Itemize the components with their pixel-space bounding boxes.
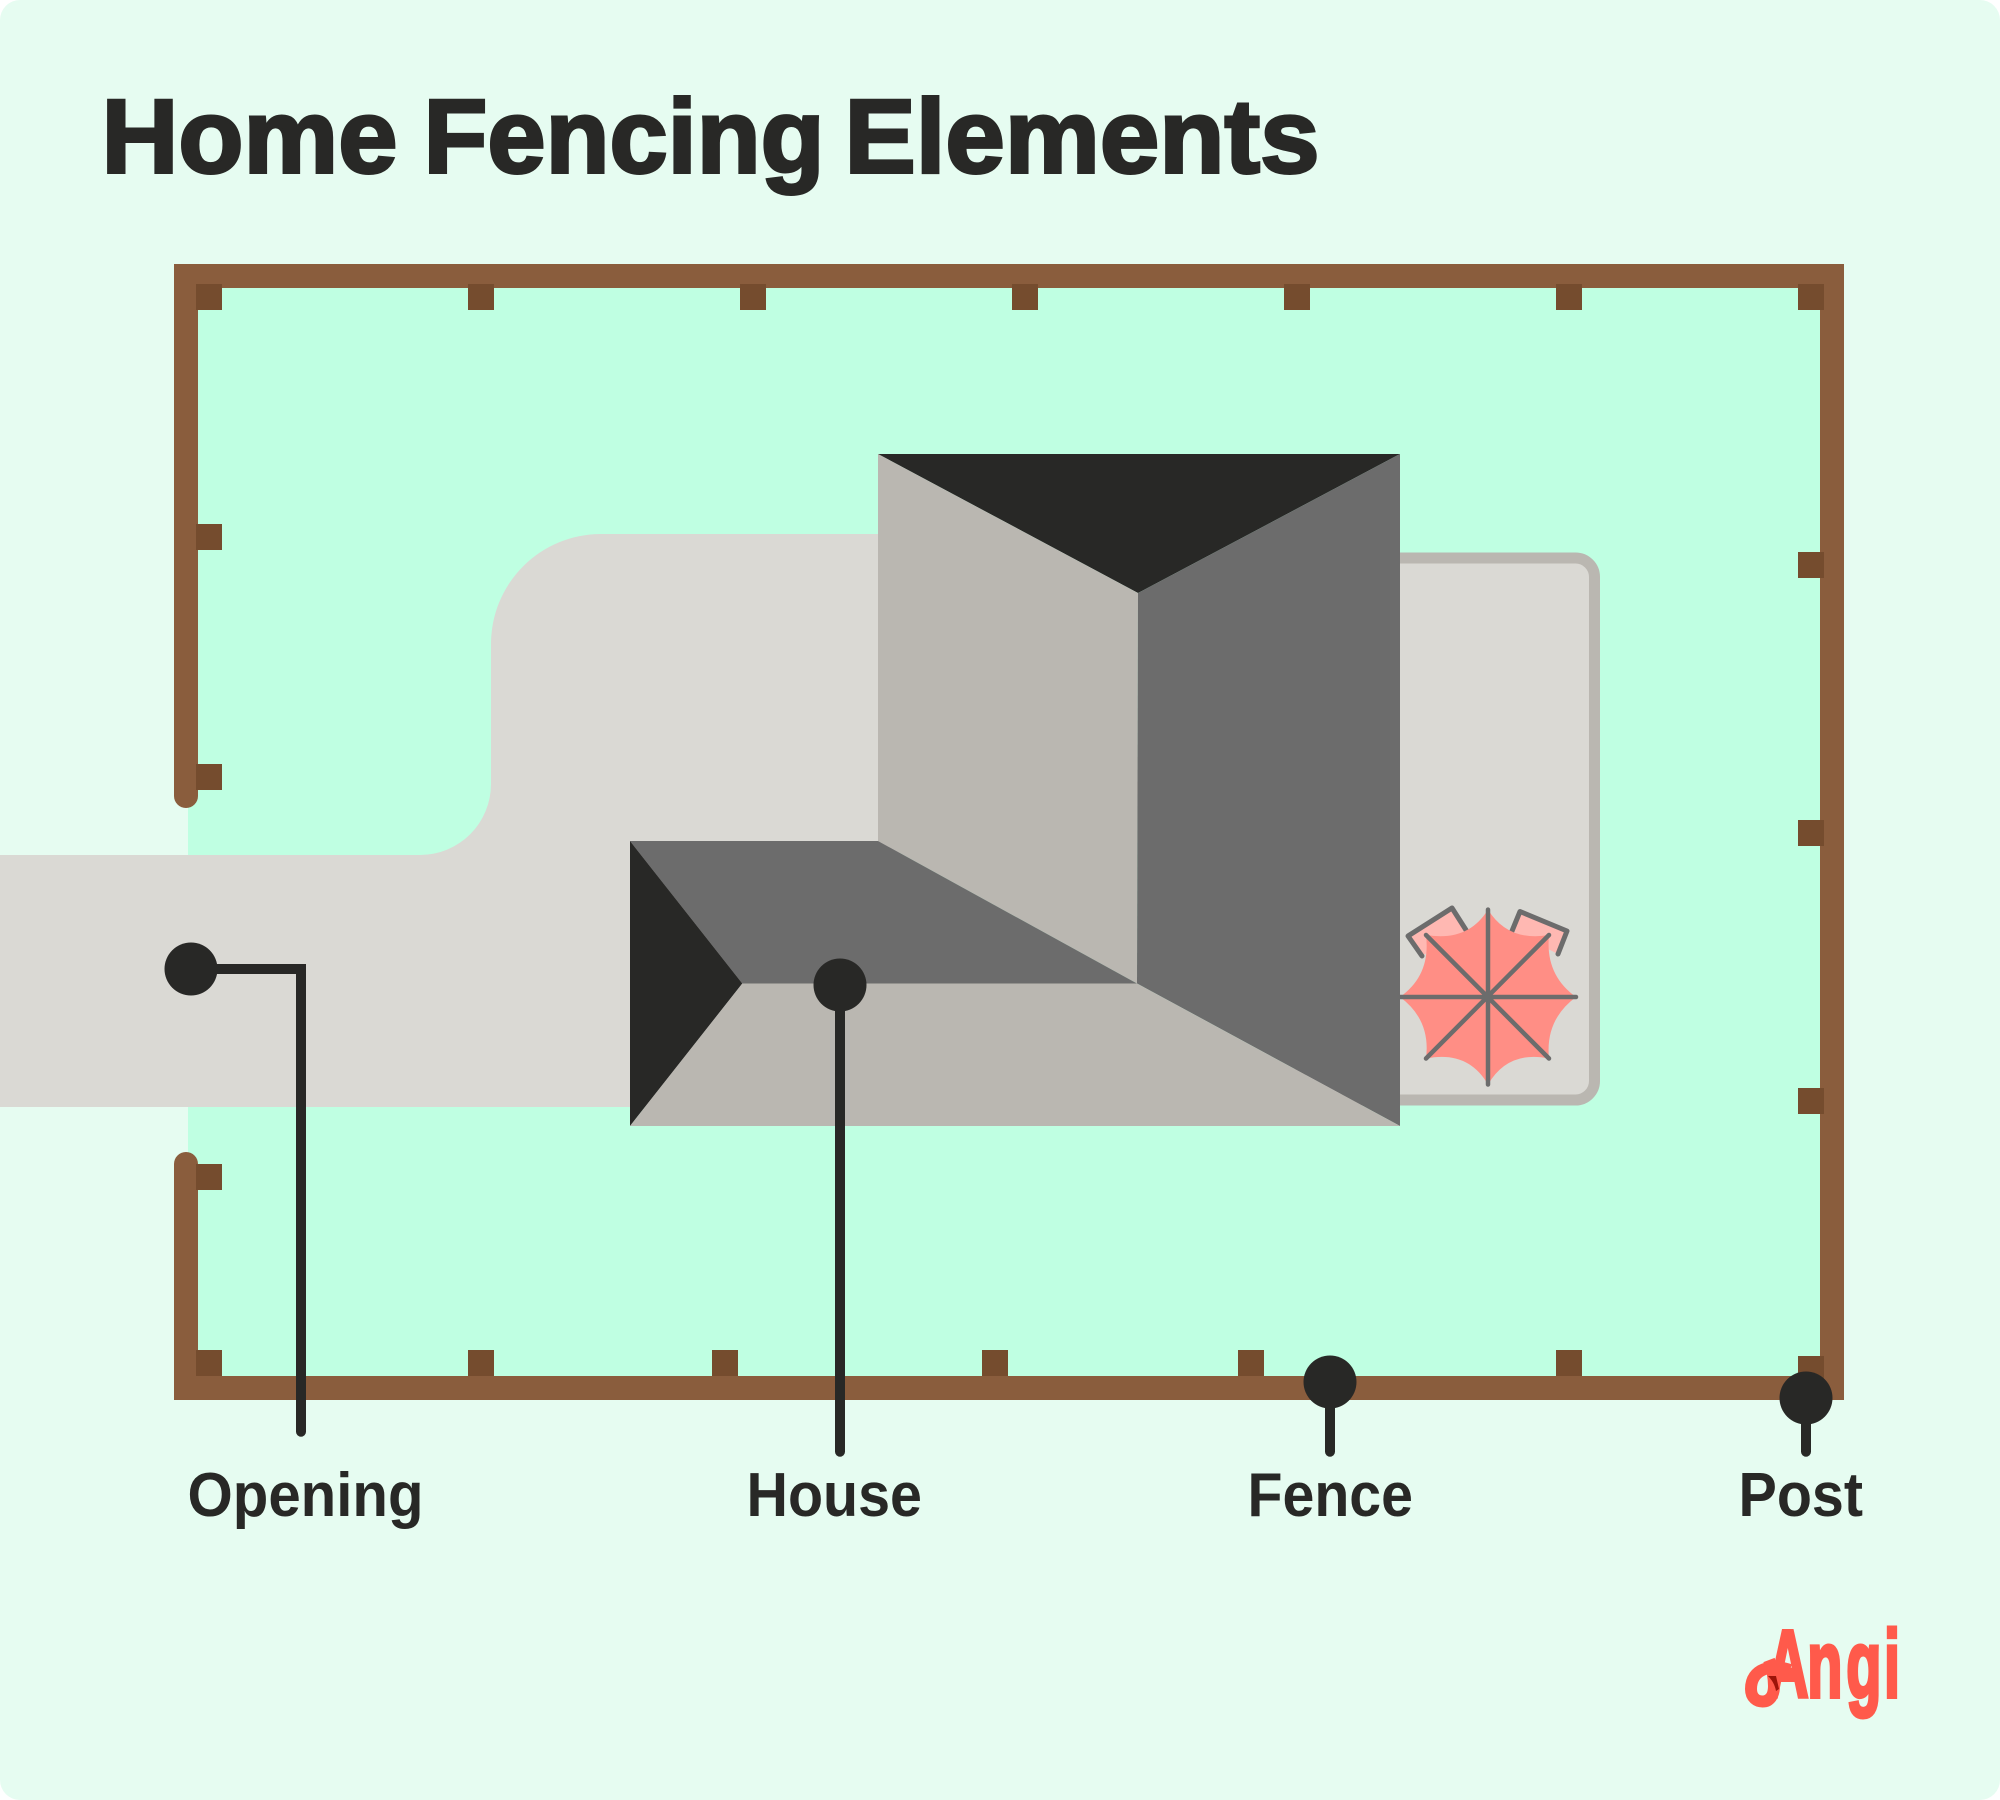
callout: post: Post <box>1738 1461 1863 1530</box>
title: Elements <box>844 78 1320 196</box>
icon: left chair <box>1408 908 1466 956</box>
callout: opening: Opening <box>188 1461 424 1530</box>
icon: umbrella ribs <box>1400 910 1576 1084</box>
fence <box>186 276 1832 1388</box>
logo: Angi: Angi <box>1767 1610 1900 1718</box>
icon: right chair <box>1512 912 1567 954</box>
callout: fence <box>1248 1356 1413 1530</box>
patio umbrella and chairs <box>1400 908 1576 1084</box>
callout: post <box>1738 1372 1863 1530</box>
title: Fencing <box>424 78 824 196</box>
callout: opening <box>164 942 424 1530</box>
callout: house: House <box>746 1461 922 1530</box>
fence posts <box>196 284 1824 1382</box>
title: Home <box>102 78 398 196</box>
callout: fence: Fence <box>1248 1461 1413 1530</box>
driveway <box>0 534 900 1107</box>
callout: house <box>746 958 922 1530</box>
house roof <box>630 454 1400 1126</box>
icon: umbrella canopy <box>1400 910 1576 1084</box>
title <box>102 78 1320 196</box>
lawn <box>188 276 1832 1388</box>
patio <box>1300 558 1594 1100</box>
